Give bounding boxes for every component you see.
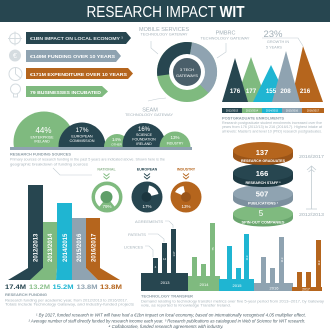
disc: research staff: RESEARCH STAFF ² (246, 181, 281, 185)
semicircle chart: ENTERPRISE (31, 136, 54, 140)
year legend strip: 2012/2013 (226, 109, 239, 113)
chart labels: AGREEMENTS (135, 220, 164, 224)
year legend strip: 2014/2015 (266, 109, 279, 113)
semicircle chart: 44% (35, 126, 52, 135)
block: 2015: 113 (245, 255, 249, 260)
panel: european gauge (132, 168, 162, 212)
panel: european gauge: 17% (142, 204, 152, 209)
enrolments text: POSTGRADUATE ENROLMENTS (222, 116, 285, 120)
enrolments text: Research postgraduate student enrolments increased over five (222, 121, 322, 125)
semicircle chart: IRELAND (34, 140, 50, 144)
panel: industry gauge: INDUSTRY (177, 168, 196, 172)
bar chart: 2012/2013 (34, 233, 40, 262)
enrolments text: all levels: Master's and level 10 (PhD) research postgraduates. (222, 130, 322, 134)
block: 2017: 119 (317, 260, 321, 265)
bar values: 13.8M (100, 284, 122, 291)
header banner: RESEARCH IMPACT WIT (86, 4, 245, 21)
bar values: 13.8M (76, 284, 98, 291)
bar values: 15.2M (52, 284, 74, 291)
growth callout (262, 29, 303, 50)
enrolments text (222, 116, 322, 134)
block: 2013: 137 (172, 251, 176, 257)
semicircle chart: 16% (138, 127, 151, 133)
label: SEAM (125, 108, 174, 117)
research funding text (5, 293, 134, 306)
semicircle chart: COMMISSION (70, 139, 95, 143)
year legend strip (222, 108, 324, 113)
block: 2016 (254, 237, 293, 291)
block: 2013 (141, 229, 188, 291)
triangle chart: 176 (230, 88, 241, 95)
technology transfer text (141, 294, 324, 308)
bar values: 13.2M (29, 284, 50, 291)
growth callout: 5 YEARS (266, 46, 282, 50)
block: 2013: 4 (155, 265, 157, 269)
header banner (0, 0, 330, 22)
panel: research funding bars (5, 185, 134, 306)
timeline arrow (299, 154, 324, 218)
technology transfer text: TECHNOLOGY TRANSFER (141, 294, 193, 298)
panel: industry gauge: 13% (181, 204, 191, 209)
block: 2013: 14 (163, 257, 166, 261)
donut chart (157, 42, 217, 102)
disc: research graduates: RESEARCH GRADUATES (241, 159, 286, 163)
bar chart: 2013/2014 (48, 233, 54, 262)
semicircle chart: INDUSTRY (167, 142, 184, 146)
growth callout: 23% (263, 29, 283, 40)
year legend strip: 2013/2014 (246, 109, 259, 113)
block: 2016: 2016 (270, 286, 279, 290)
block: 2013: 2013 (161, 280, 170, 285)
label: SEAM: TECHNOLOGY GATEWAY (125, 113, 174, 117)
bar chart (8, 185, 120, 280)
research funding text: Research funding per academic year, from 2012/2013 to 2016/2017. (5, 298, 128, 302)
block: 2017: 2017 (302, 288, 310, 292)
icon: light bulb (10, 84, 20, 97)
disc: publications (233, 185, 293, 208)
footnotes: ² Average number of staff directly funded by research income each year. ³ Research publications as catalogued in Web of Science for WIT research. (28, 318, 306, 323)
label: PMBRC (200, 30, 250, 40)
footnotes: ⁴ Collaborative, funded research agreements with industry. (108, 324, 224, 329)
block: 2015: 2015 (233, 283, 242, 288)
panel: national gauge (92, 168, 122, 212)
block: 2014: 2014 (200, 282, 209, 287)
funding sources text: geographic breakdown of funding sources (10, 162, 88, 166)
disc: spin-out companies (233, 205, 293, 226)
bar values: 17.4M (5, 284, 26, 291)
disc: spin-out companies: SPIN-OUT COMPANIES (242, 220, 285, 224)
technology transfer text: Demand relating to technology transfer metrics over five 5-year period from 2013–2017, by Gateway (141, 300, 324, 304)
chart labels: LICENCES (124, 246, 144, 250)
enrolments text: years from 176 (2012/13) to 216 (2016/17). Highest intake at (222, 125, 322, 129)
panel: national gauge: NATIONAL (97, 168, 116, 172)
block: 2017 (292, 240, 322, 292)
panel: research funding sources (10, 112, 192, 175)
arrow: expenditure: €171M EXPENDITURE OVER 10 YEARS (30, 72, 127, 77)
footnotes (28, 312, 306, 329)
panel: headline impact arrows (8, 32, 133, 97)
semicircle chart: FOUNDATION (132, 138, 156, 142)
arrow: funding: €149M FUNDING OVER 10 YEARS (30, 54, 115, 59)
block: 2016: 113 (280, 257, 284, 262)
disc: publications: 507 (256, 190, 268, 198)
icon: euro coin: € (13, 53, 17, 60)
triangle chart (222, 46, 323, 102)
label: PMBRC: PMBRC (216, 30, 235, 36)
block: 2015 (219, 234, 254, 291)
arrow: businesses incubated: 79 BUSINESSES INCUBATED (30, 90, 102, 95)
panel: technology transfer (124, 220, 324, 308)
funding sources text: Primary sources of research funding in the past 5 years are indicated above. Shown here is the (10, 158, 165, 162)
semicircle chart: 14% (112, 137, 121, 142)
icon: target (8, 32, 22, 46)
donut chart: GATEWAYS (176, 73, 198, 78)
triangle chart: 216 (300, 88, 311, 95)
chart labels (124, 220, 173, 257)
year legend strip: 2016/2017 (307, 109, 320, 113)
triangle chart: 155 (266, 88, 277, 95)
semicircle chart: SCIENCE (136, 133, 153, 137)
technology transfer text: vote, as reported to Knowledge Transfer Ireland. (141, 304, 231, 308)
triangle chart: 208 (280, 88, 291, 95)
disc: research staff (233, 164, 293, 187)
triangle chart: 177 (246, 88, 257, 95)
block: 2014: 75 (211, 247, 215, 251)
disc: publications: PUBLICATIONS ³ (248, 202, 279, 206)
semicircle chart: EUROPEAN (71, 134, 93, 138)
arrow: local economy impact: €1BN IMPACT ON LOCAL ECONOMY ¹ (30, 36, 123, 41)
semicircle chart: 13% (170, 135, 180, 140)
panel: postgraduate enrolments (222, 29, 324, 134)
semicircle chart (10, 112, 192, 150)
panel: industry gauge (170, 168, 202, 212)
bar chart: 2016/2017 (92, 233, 98, 262)
icon: pie chart (9, 68, 22, 80)
funding sources text: RESEARCH FUNDING SOURCES (10, 152, 72, 156)
panel: national gauge: 79% (102, 204, 112, 209)
disc: research staff: 166 (256, 169, 268, 178)
semicircle chart: IRELAND (136, 142, 152, 146)
semicircle chart: OTHER (111, 142, 123, 146)
chart labels: PATENTS (128, 233, 147, 237)
bar values (5, 284, 122, 291)
disc: research graduates (233, 142, 293, 165)
timeline arrow: 2016/2017 (299, 154, 324, 160)
panel: stacked discs (233, 142, 324, 226)
growth callout: GROWTH IN (267, 40, 289, 44)
bar chart: 2014/2015 (63, 233, 69, 262)
bar chart: 2015/2016 (77, 233, 83, 262)
label: PMBRC: TECHNOLOGY GATEWAY (200, 36, 250, 40)
research funding text: Totals include Technology Gateway, and industry-funded projects (5, 302, 134, 306)
disc: spin-out companies: 5 (259, 209, 264, 218)
label: SEAM: SEAM (142, 108, 158, 114)
panel: technology gateways donut (125, 27, 250, 117)
semicircle chart: 17% (75, 127, 89, 134)
footnotes: ¹ By 2027, funded research in WIT will have had a €1bn impact on local economy, based on internationally recognised 4.05 multiplier effect. (36, 312, 306, 318)
label: mobile services (139, 27, 189, 36)
label: mobile services: MOBILE SERVICES (139, 27, 189, 33)
funding sources text (10, 152, 165, 166)
donut chart: 3 TECH (180, 67, 194, 72)
disc: research graduates: 137 (256, 148, 268, 157)
research funding text: RESEARCH FUNDING (5, 293, 47, 297)
year legend strip: 2015/2016 (286, 109, 299, 113)
timeline arrow: 2012/2013 (299, 212, 324, 218)
block: 2014 (188, 223, 220, 291)
panel: european gauge: EUROPEAN (137, 168, 158, 172)
label: mobile services: TECHNOLOGY GATEWAY (140, 32, 188, 36)
